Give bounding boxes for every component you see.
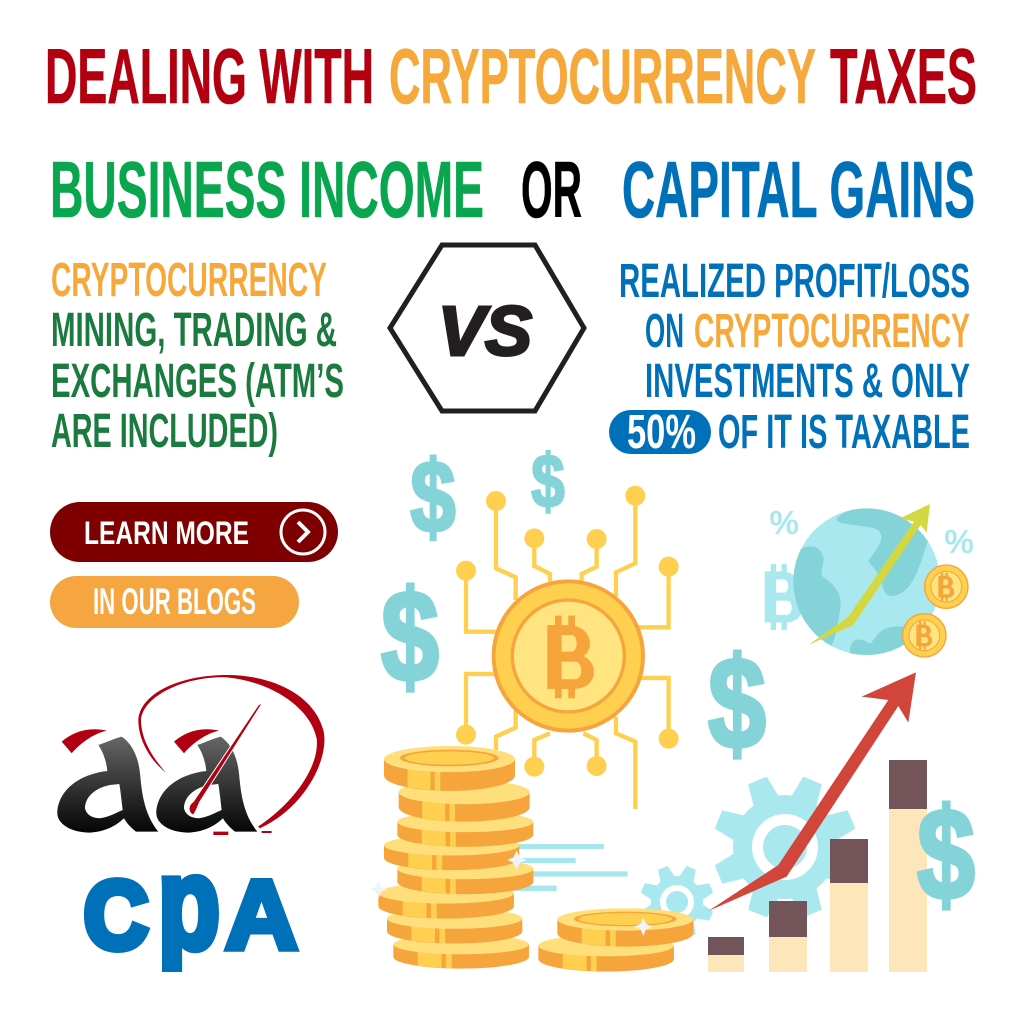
button: in our blogs (50, 576, 299, 628)
text block: business income description: EXCHANGES (ATM’S (51, 355, 344, 408)
text block: business income description: CRYPTOCURRENCY (51, 254, 327, 307)
logo: cpa: A (225, 860, 298, 970)
heading: business income or capital gains: OR (521, 145, 582, 234)
icon: dollar sign right: $ (917, 781, 975, 927)
icon: vs hexagon (390, 245, 584, 411)
button: learn more (50, 502, 338, 562)
icon: gold coin stack (370, 746, 533, 969)
icon: dollar signs top: $ (531, 441, 565, 524)
icon: globe with coins: % (769, 505, 799, 542)
text block: capital gains description: ON (645, 305, 684, 358)
logo: aa emblem (57, 675, 324, 835)
heading: business income or capital gains: BUSINESS INCOME (50, 145, 484, 234)
icon: vs hexagon: VS (438, 292, 532, 370)
icon: globe with coins (765, 504, 974, 667)
icon: bitcoin circuit (456, 486, 679, 809)
text block: capital gains description (609, 255, 970, 459)
icon: dollar signs top (381, 439, 766, 776)
icon: dollar signs top: $ (708, 630, 766, 776)
logo: cpa: C (84, 862, 148, 969)
logo: cpa (84, 874, 300, 972)
text block: business income description: ARE INCLUDED) (51, 405, 278, 458)
icon: small gear (640, 865, 714, 939)
text block: capital gains description: 50% (627, 406, 696, 459)
icon: motion lines (513, 844, 628, 891)
bar chart (708, 760, 927, 972)
arrow: red growth (708, 672, 916, 911)
icon: dollar signs top: $ (410, 439, 456, 554)
icon: gold coin pile (538, 908, 693, 972)
button: learn more: LEARN MORE (84, 515, 249, 551)
icon: faded bitcoin (765, 564, 802, 630)
icon: globe with coins: % (944, 524, 974, 561)
title (45, 32, 977, 120)
text block: business income description: MINING, TRADING & (51, 304, 337, 357)
button: in our blogs: IN OUR BLOGS (93, 581, 256, 622)
title: DEALING WITH (45, 32, 374, 120)
icon: large gear (713, 775, 857, 919)
text block: business income description (51, 254, 344, 458)
logo: cpa: p (158, 830, 220, 976)
icon: dollar signs top: $ (381, 563, 439, 709)
